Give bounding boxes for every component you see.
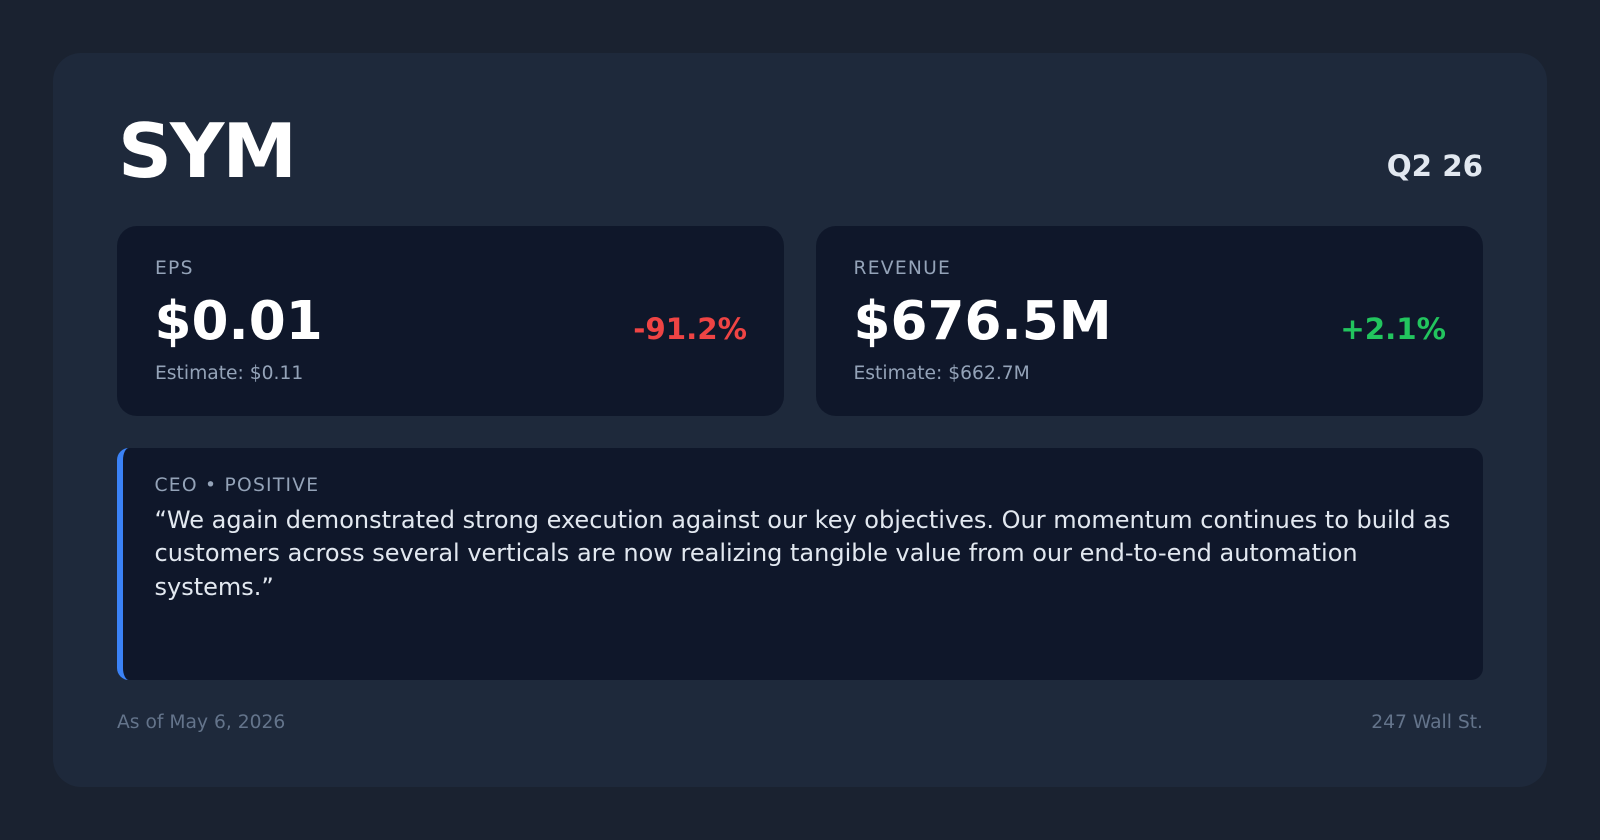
revenue surprise percent: +2.1%	[1340, 312, 1446, 346]
quote text	[154, 506, 1450, 601]
panel: EPS metric	[117, 226, 784, 416]
quote text: customers across several verticals are now realizing tangible value from our end-to-end automation	[154, 539, 1358, 567]
revenue estimate: Estimate: $662.7M	[854, 363, 1030, 384]
EPS surprise percent: -91.2%	[633, 312, 747, 346]
quote text: systems.”	[154, 573, 274, 601]
revenue label: REVENUE	[854, 258, 951, 279]
panel: revenue metric	[816, 226, 1483, 416]
revenue value: $676.5M	[854, 290, 1112, 352]
EPS estimate: Estimate: $0.11	[155, 363, 303, 384]
footer: source: 247 Wall St.	[1371, 712, 1483, 733]
heading: fiscal quarter: Q2 26	[1387, 149, 1483, 183]
quote text: “We again demonstrated strong execution against our key objectives. Our momentum continues to build as	[154, 506, 1450, 534]
footer: date: As of May 6, 2026	[117, 712, 285, 733]
title: ticker: SYM	[118, 107, 295, 195]
EPS label: EPS	[155, 258, 194, 279]
EPS value: $0.01	[154, 290, 323, 352]
panel: CEO quote	[117, 448, 1483, 680]
quote attribution: CEO • POSITIVE	[154, 475, 319, 496]
